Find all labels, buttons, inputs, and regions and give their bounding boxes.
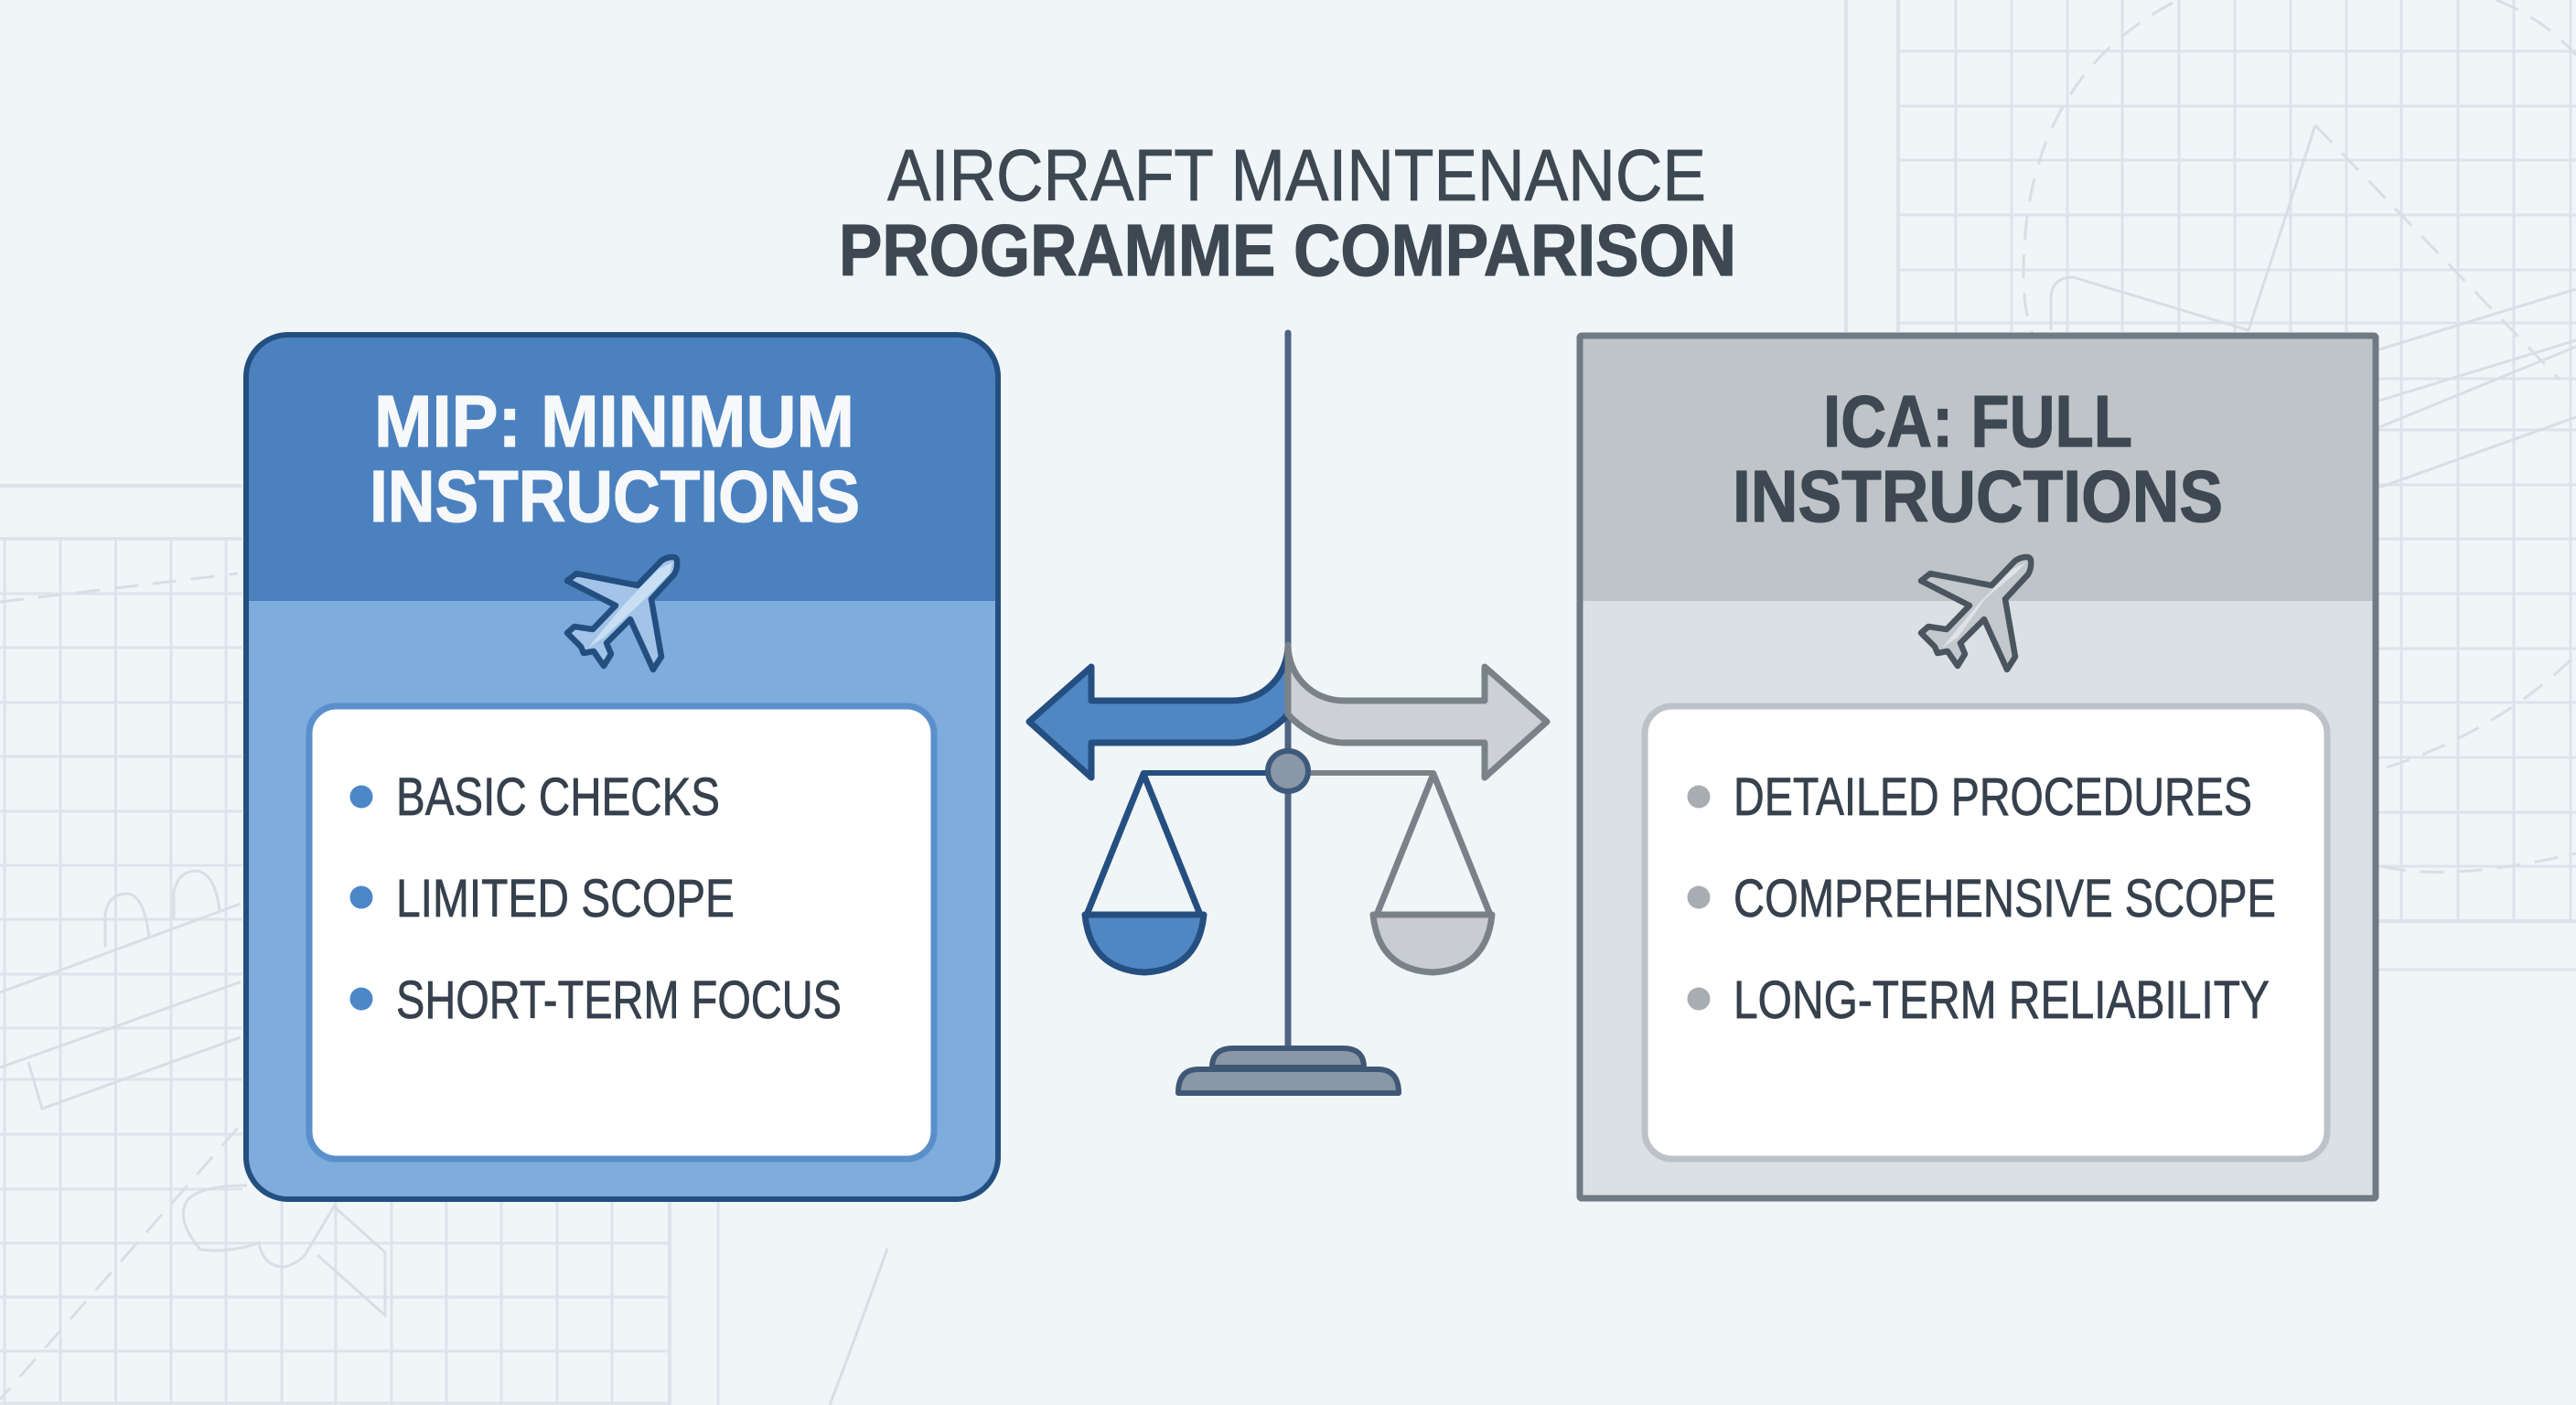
list box: ICA (1645, 706, 2327, 1159)
panel: MIP minimum instructions (246, 335, 998, 1199)
bullet: long-term reliability: LONG-TERM RELIABILITY (1733, 971, 2270, 1030)
icon: airplane MIP (567, 557, 677, 670)
left pan (1085, 774, 1204, 972)
heading: MIP (370, 381, 860, 537)
title (839, 134, 1736, 291)
heading: MIP: MIP: MINIMUM (374, 381, 854, 462)
heading: MIP: INSTRUCTIONS (370, 456, 860, 537)
pivot (1268, 751, 1308, 791)
bullet: limited scope: LIMITED SCOPE (396, 869, 735, 928)
beam right (1309, 770, 1433, 776)
right pan (1373, 774, 1492, 972)
title: PROGRAMME COMPARISON (839, 209, 1736, 291)
base (1178, 1048, 1399, 1093)
bullet: comprehensive scope: COMPREHENSIVE SCOPE (1733, 869, 2276, 928)
stem (1284, 333, 1292, 1048)
list box: MIP (309, 706, 934, 1159)
bullet: basic checks: BASIC CHECKS (396, 767, 720, 827)
panel: ICA full instructions (1580, 336, 2376, 1198)
heading: ICA: INSTRUCTIONS (1733, 456, 2223, 537)
beam left (1143, 770, 1267, 776)
arrow: left blue (1029, 645, 1288, 778)
bullet: detailed procedures: DETAILED PROCEDURES (1733, 767, 2252, 827)
title: AIRCRAFT MAINTENANCE (887, 134, 1706, 216)
bullet: short-term focus: SHORT-TERM FOCUS (396, 971, 842, 1030)
heading: ICA: ICA: FULL (1823, 381, 2132, 462)
central balance scale with arrows (1029, 333, 1547, 1093)
arrow: right gray (1288, 645, 1547, 778)
icon: airplane ICA (1921, 557, 2031, 670)
heading: ICA (1733, 381, 2223, 537)
